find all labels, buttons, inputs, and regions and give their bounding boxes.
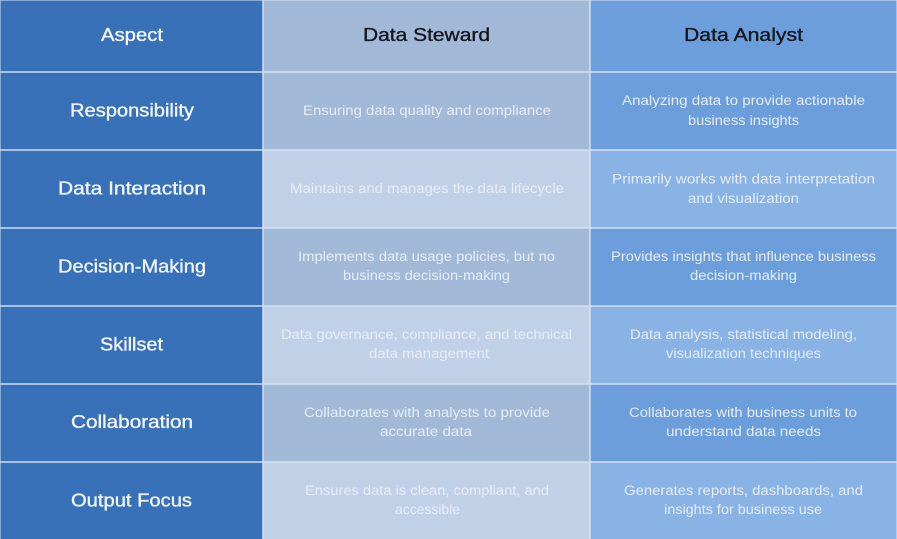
steward: output focus: Ensures data is clean, compliant, and (305, 483, 549, 498)
analyst: responsibility (622, 93, 865, 128)
steward: output focus: accessible (395, 502, 460, 517)
analyst: decision-making (611, 249, 876, 283)
analyst: collaboration: Collaborates with business units to (629, 405, 857, 420)
steward: decision-making (298, 249, 555, 283)
analyst: collaboration: understand data needs (666, 424, 821, 439)
analyst: data interaction (612, 172, 875, 206)
heading: Data Analyst: Data Analyst (684, 25, 803, 45)
steward: data interaction: Maintains and manages the data lifecycle (290, 181, 564, 196)
analyst: data interaction: Primarily works with data interpretation (612, 172, 875, 186)
analyst: output focus: Generates reports, dashboards, and (624, 483, 863, 498)
row label: Data Interaction: Data Interaction (58, 178, 206, 198)
steward: skillset: Data governance, compliance, and technical (281, 327, 572, 342)
analyst: output focus: insights for business use (664, 502, 822, 517)
steward: output focus (305, 483, 549, 517)
row label: Decision-Making: Decision-Making (58, 256, 206, 276)
analyst: skillset (630, 327, 857, 361)
analyst: skillset: Data analysis, statistical modeling, (630, 327, 857, 342)
steward: collaboration: accurate data (380, 424, 473, 439)
steward: skillset (281, 327, 572, 361)
steward: decision-making: business decision-making (343, 268, 510, 283)
column: Data Steward (264, 0, 589, 539)
steward: collaboration: Collaborates with analysts to provide (304, 405, 550, 420)
row label: Output Focus: Output Focus (71, 490, 192, 510)
column: Aspect (0, 0, 262, 539)
heading: Aspect: Aspect (101, 25, 163, 45)
steward: collaboration (304, 405, 550, 439)
analyst: responsibility: Analyzing data to provide actionable (622, 93, 865, 108)
steward: decision-making: Implements data usage policies, but no (298, 249, 555, 264)
steward: responsibility: Ensuring data quality and compliance (303, 103, 551, 118)
analyst: responsibility: business insights (688, 113, 799, 128)
analyst: decision-making: Provides insights that influence business (611, 249, 876, 264)
analyst: collaboration (629, 405, 857, 439)
analyst: skillset: visualization techniques (666, 346, 821, 361)
heading: Data Steward: Data Steward (363, 25, 490, 45)
analyst: decision-making: decision-making (690, 268, 797, 283)
steward: skillset: data management (369, 346, 489, 361)
column: Data Analyst (591, 0, 896, 539)
row label: Skillset: Skillset (100, 334, 163, 354)
row label: Collaboration: Collaboration (71, 412, 193, 432)
row label: Responsibility: Responsibility (70, 100, 194, 120)
analyst: data interaction: and visualization (688, 191, 799, 206)
analyst: output focus (624, 483, 863, 517)
